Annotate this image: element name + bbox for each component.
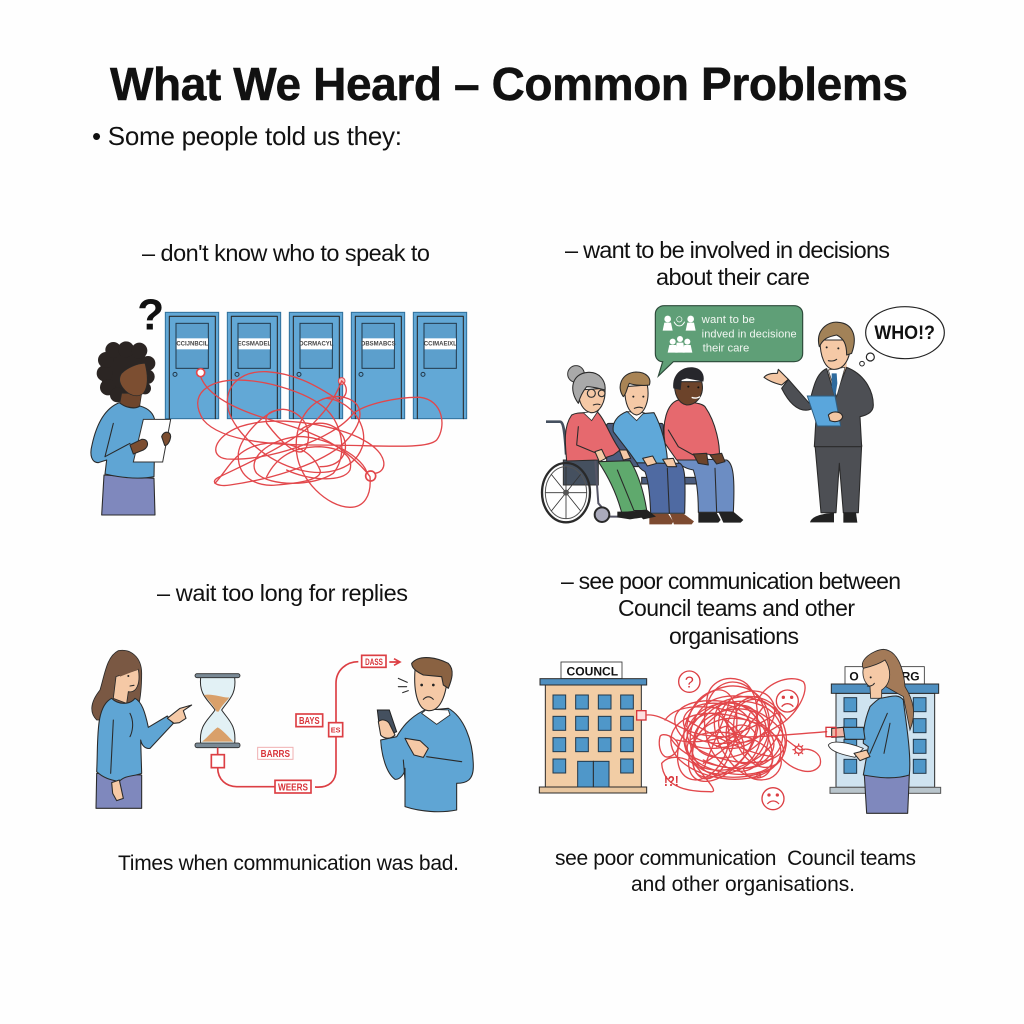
title: What We Heard – Common Problems [110, 58, 908, 110]
door 1 [165, 312, 219, 419]
label: small: ES [331, 725, 341, 734]
heading: who to speak to: – don't know who to speak to [142, 240, 430, 266]
icon: sad face top [776, 690, 798, 712]
caption right: see poor communication Council teams [555, 847, 916, 870]
small wheel [595, 507, 609, 522]
door 3 [289, 312, 343, 419]
small marks: !?! [664, 774, 679, 790]
trousers [598, 461, 647, 513]
red tangle [637, 669, 827, 810]
big wheel [542, 463, 590, 522]
caption right [555, 847, 916, 896]
arrow [389, 659, 400, 665]
red tangle: a [756, 769, 762, 780]
icon: question circle: ? [685, 675, 694, 692]
door 4 [351, 312, 405, 419]
trousers [815, 445, 862, 513]
woman with tablet [826, 649, 914, 813]
sweater [565, 411, 620, 461]
shirt and tie [828, 367, 845, 397]
icon: burst [793, 744, 804, 755]
label: bays: BAYS [299, 716, 320, 727]
door 5 [413, 312, 467, 419]
intro bullet: • Some people told us they: [92, 121, 402, 151]
row of five doors [165, 312, 467, 419]
woman with paper [91, 341, 171, 515]
heading: wait too long: – wait too long for replies [157, 580, 408, 606]
scene: people and officer [542, 306, 944, 524]
pointing hand [405, 738, 428, 757]
phone [377, 710, 397, 735]
red timeline path [211, 655, 400, 793]
label: dass [362, 655, 386, 667]
seated man: right [664, 367, 743, 523]
caption left: Times when communication was bad. [118, 852, 459, 875]
heading: poor communication: – see poor communication between [561, 568, 901, 594]
thought bubble: WHO!? [874, 323, 935, 344]
council building: COUNCL [566, 664, 618, 678]
label: bays [296, 714, 323, 727]
sweater [91, 403, 155, 478]
icon: question mark: ? [137, 290, 164, 339]
scene: council and other organisation [539, 649, 941, 813]
bench [607, 423, 700, 484]
hands [130, 439, 148, 454]
label: small [329, 723, 343, 737]
speech bubble: their care [703, 343, 749, 355]
label: dass: DASS [365, 657, 383, 667]
other org building [830, 667, 941, 793]
thought bubble [860, 307, 944, 366]
door 1: CCIJNBCIL [176, 342, 209, 348]
door 2 [227, 312, 281, 419]
wheelchair frame [546, 422, 597, 453]
hand [764, 369, 788, 385]
door 5: CCIMAEIXL [424, 342, 457, 348]
caption right: and other organisations. [631, 873, 855, 896]
label: warrs: BARRS [261, 749, 290, 760]
other org building: O [849, 670, 859, 684]
door 3: DCRMACYL [299, 342, 334, 348]
head [568, 366, 584, 382]
label: weers: WEERS [278, 782, 308, 793]
bubble icons [663, 316, 696, 353]
scene: hourglass and slow reply [92, 650, 473, 812]
hair [97, 341, 155, 402]
dense knot loops [666, 669, 795, 794]
heading: involved in decisions: – want to be involved in decisions [565, 237, 890, 263]
jacket [782, 367, 873, 447]
council building [539, 662, 647, 793]
shoes [810, 513, 834, 522]
windows [553, 695, 633, 773]
heading: poor communication: Council teams and other [618, 595, 855, 621]
officer in suit [764, 322, 873, 523]
speech bubble: indved in decisione [702, 328, 797, 340]
other org building: RG [902, 670, 920, 684]
man with phone [377, 658, 473, 812]
neck and face [119, 393, 142, 408]
hands [595, 449, 606, 462]
speech bubble [655, 306, 803, 376]
door 4: DBSMABCS [361, 342, 396, 348]
neck [828, 362, 847, 387]
woman in wheelchair [542, 366, 656, 522]
hourglass [195, 674, 240, 748]
clipboard [807, 396, 841, 426]
heading: involved in decisions: about their care [656, 264, 810, 290]
icon: question circle [679, 671, 700, 692]
head [820, 340, 850, 369]
bubble text: want to be [701, 314, 755, 326]
red tangled line [197, 369, 442, 507]
woman pointing [92, 650, 192, 808]
heading: poor communication [561, 568, 901, 649]
paper [133, 419, 171, 462]
heading: involved in decisions [565, 237, 890, 290]
icon: sad face bottom [762, 788, 784, 810]
seated man: middle [613, 372, 694, 524]
scene: doors and confused woman [91, 290, 467, 515]
door 2: ECSMADEL [238, 342, 271, 348]
skirt [102, 475, 155, 515]
heading: poor communication: organisations [669, 623, 799, 649]
entrance [578, 761, 609, 787]
